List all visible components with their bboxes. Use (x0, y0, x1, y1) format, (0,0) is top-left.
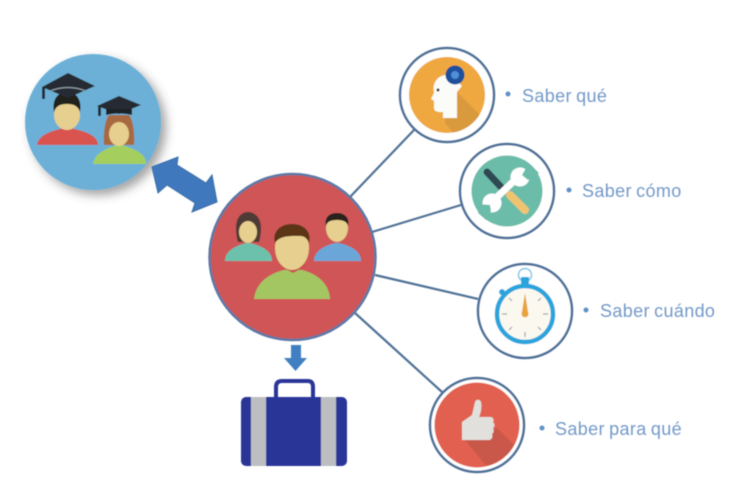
icon: stopwatch (497, 268, 553, 342)
node: saber qué (400, 48, 494, 142)
label: saber qué: Saber qué (522, 86, 607, 106)
label: saber para qué: Saber para qué (555, 419, 682, 439)
node: saber cómo (460, 144, 554, 238)
node: saber cuándo (478, 264, 572, 358)
label: saber cómo: Saber cómo (582, 181, 682, 201)
panel: central team circle (210, 174, 376, 340)
arrow: double-headed blue (152, 157, 217, 212)
icon: female graduate (93, 96, 146, 164)
node: saber para qué (430, 378, 524, 473)
icon: screwdriver and wrench (478, 163, 539, 220)
icon: male graduate (37, 73, 98, 145)
icon: thumbs up (461, 399, 514, 466)
icon: right man (314, 213, 361, 261)
label: saber cuándo: Saber cuándo (600, 301, 715, 321)
arrow: down to briefcase (284, 345, 307, 371)
icon: briefcase (241, 381, 347, 466)
icon: head with idea (430, 64, 480, 132)
icon: left woman (225, 212, 272, 261)
connector lines (350, 130, 478, 392)
icon: center man (254, 224, 330, 299)
panel: graduates circle (25, 54, 166, 195)
